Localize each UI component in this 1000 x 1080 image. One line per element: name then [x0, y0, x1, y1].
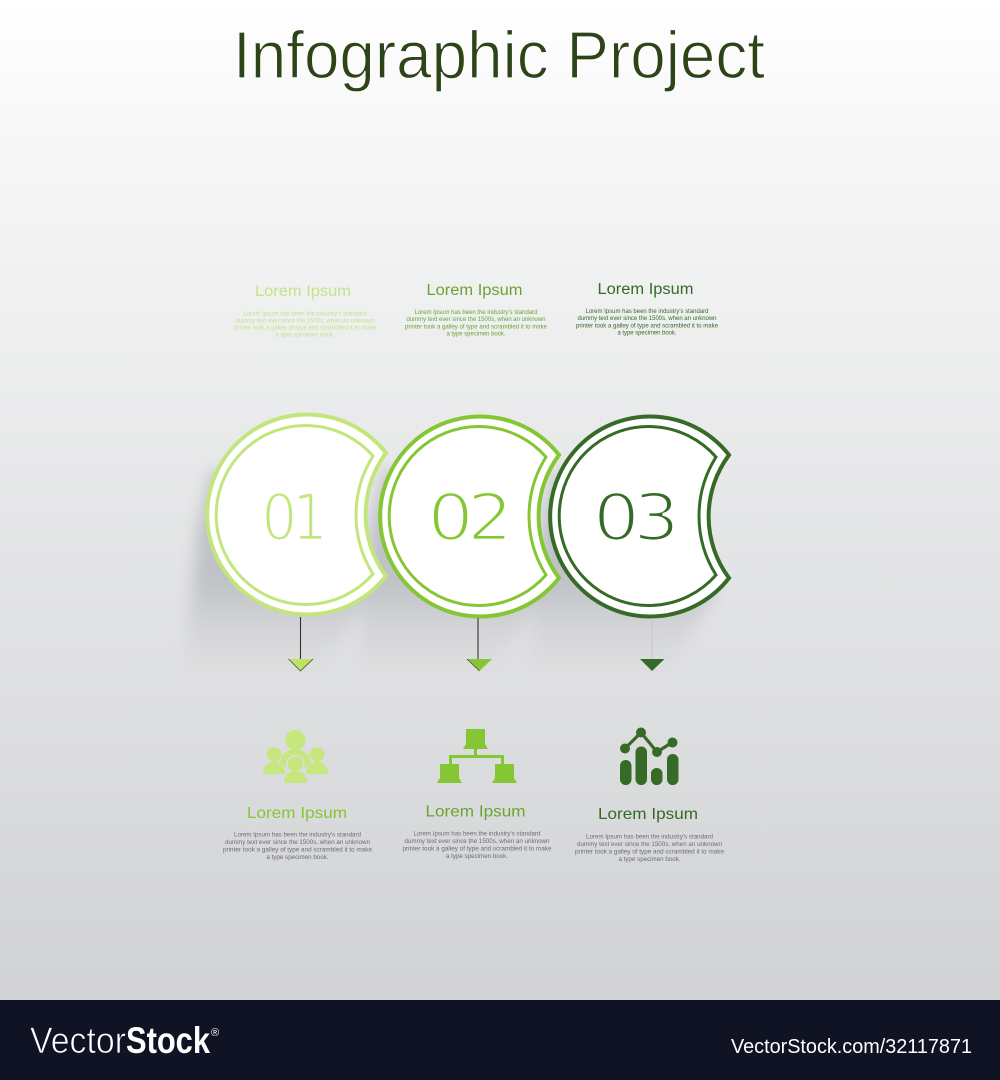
step 3 badge: [550, 417, 729, 616]
lower text block 3: Lorem Ipsum: [598, 806, 698, 823]
top text block 3: Lorem Ipsum has been the industry's standard: [586, 308, 709, 315]
shadow: step 1: [184, 470, 372, 672]
top text block 3: printer took a galley of type and scrambled it to make: [576, 322, 718, 330]
footer logo bold part: Stock: [126, 1020, 210, 1061]
top text block 1: Lorem Ipsum has been the industry's standard: [244, 310, 367, 318]
arrow 3: [640, 618, 664, 671]
icon: chart: [620, 728, 678, 785]
arrow 1: [288, 617, 313, 671]
lower text block 2: Lorem Ipsum has been the industry's standard: [414, 830, 541, 838]
shadow: step 3: [528, 470, 716, 672]
top text block 2: Lorem Ipsum: [426, 282, 522, 299]
top text block 1: [234, 283, 376, 338]
step 1 badge: [207, 414, 386, 614]
shadow: step 2: [356, 470, 545, 672]
lower text block 2: a type specimen book.: [446, 853, 508, 860]
top text block 3: [576, 281, 718, 336]
lower text block 3: printer took a galley of type and scrambled it to make: [575, 848, 724, 856]
lower text block 2: printer took a galley of type and scrambled it to make: [402, 846, 552, 852]
lower text block 1: a type specimen book.: [266, 854, 329, 861]
lower text block 2: dummy text ever since the 1500s, when an unknown: [404, 838, 550, 845]
step 2 badge: 02: [428, 481, 506, 556]
top text block 2: [405, 282, 547, 338]
footer logo light part: Vector: [30, 1020, 126, 1061]
step 1 badge: 01: [262, 481, 323, 556]
arrow 2: [467, 618, 492, 671]
lower text block 2: [402, 804, 552, 860]
top text block 1: a type specimen book.: [276, 332, 335, 338]
top text block 3: Lorem Ipsum: [598, 281, 694, 298]
lower text block 3: [575, 806, 724, 863]
lower text block 1: Lorem Ipsum has been the industry's standard: [234, 832, 361, 838]
top text block 2: dummy text ever since the 1500s, when an unknown: [406, 316, 546, 323]
footer band: [0, 1000, 1000, 1080]
footer url: VectorStock.com/32117871: [731, 1036, 972, 1058]
footer registered mark: ®: [211, 1027, 219, 1039]
lower text block 3: a type specimen book.: [618, 856, 681, 863]
title: Infographic Project: [233, 18, 765, 93]
lower text block 1: dummy text ever since the 1500s, when an unknown: [225, 839, 370, 846]
step 3 badge: 03: [593, 481, 675, 556]
lower text block 1: printer took a galley of type and scrambled it to make: [223, 846, 372, 854]
top text block 1: dummy text ever since the 1500s, when an unknown: [236, 318, 375, 324]
top text block 3: dummy text ever since the 1500s, when an unknown: [578, 315, 717, 322]
lower text block 1: Lorem Ipsum: [247, 805, 347, 822]
top text block 2: Lorem Ipsum has been the industry's standard: [414, 309, 538, 316]
step 2 badge: [380, 417, 559, 616]
lower text block 2: Lorem Ipsum: [426, 804, 526, 820]
top text block 1: Lorem Ipsum: [255, 283, 351, 300]
top text block 2: a type specimen book.: [446, 330, 506, 338]
top text block 2: printer took a galley of type and scrambled it to make: [405, 324, 547, 330]
top text block 3: a type specimen book.: [618, 330, 677, 336]
top text block 1: printer took a galley of type and scrambled it to make: [234, 324, 376, 332]
lower text block 1: [223, 805, 372, 861]
icon: network: [437, 729, 517, 783]
icon: people: [263, 730, 328, 783]
lower text block 3: dummy text ever since the 1500s, when an unknown: [577, 841, 722, 848]
lower text block 3: Lorem Ipsum has been the industry's standard: [586, 834, 713, 840]
